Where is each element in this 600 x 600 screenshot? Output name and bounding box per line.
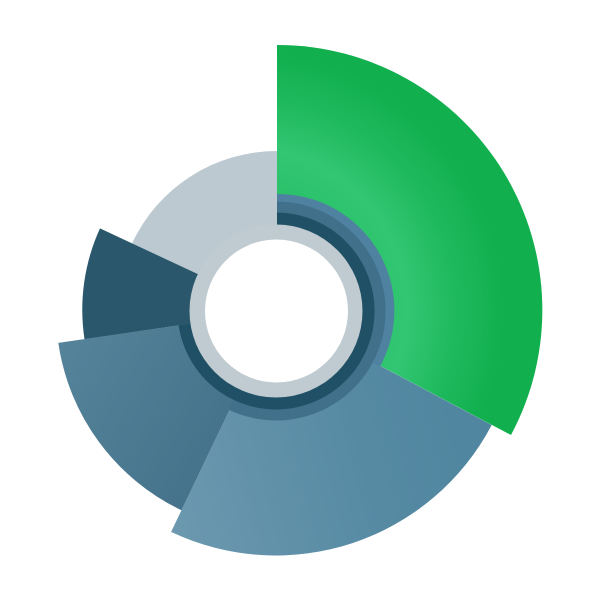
ring: dark band xyxy=(179,212,375,409)
segment: dark teal xyxy=(82,228,277,339)
segment: green largest xyxy=(277,45,542,435)
segment: light steel blue xyxy=(171,311,492,555)
ring: light band xyxy=(190,224,362,398)
segment: light slate xyxy=(132,151,277,311)
segment: medium slate blue xyxy=(58,311,277,510)
center hole xyxy=(205,240,348,382)
ring: medium band xyxy=(229,202,386,420)
ring: blue outer arc xyxy=(277,194,394,366)
